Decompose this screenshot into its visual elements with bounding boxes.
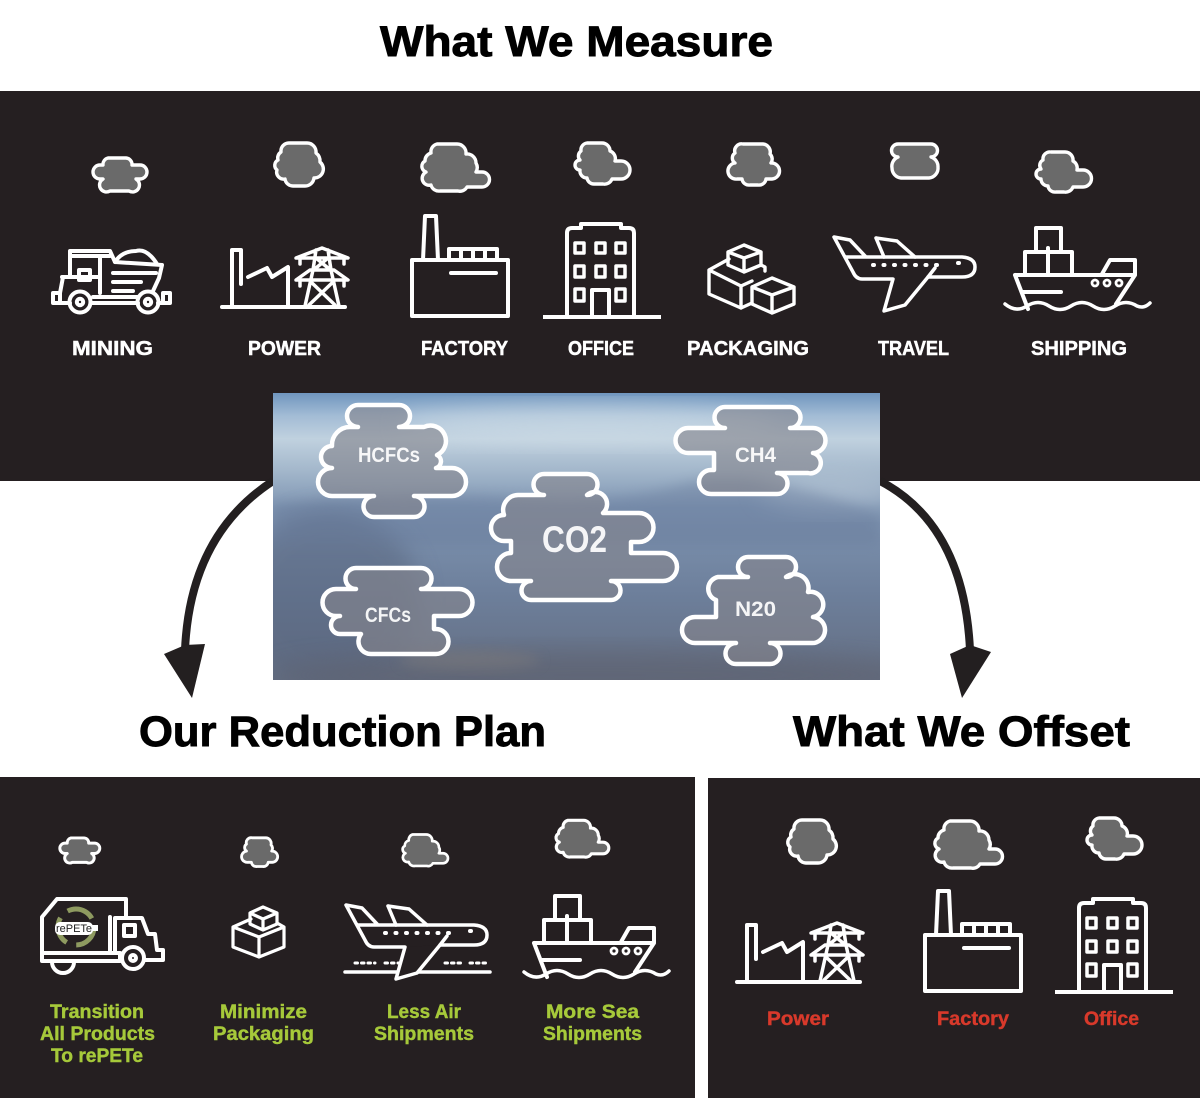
factory cloud [422, 144, 490, 191]
cloud: less air [403, 834, 448, 866]
office cloud [575, 143, 630, 184]
icon: factory [412, 216, 508, 316]
text: transition all products to rePETe: To rePETe [51, 1046, 143, 1067]
text: more sea shipments: Shipments [543, 1024, 642, 1045]
label: office: OFFICE [568, 338, 634, 360]
logo: rePETe label: rePETe [56, 923, 92, 935]
cloud: HCFCs [318, 405, 466, 517]
label: power: POWER [248, 338, 322, 360]
text: transition all products to rePETe [40, 1002, 155, 1067]
panel: our reduction plan [0, 777, 695, 1098]
text: more sea shipments: More Sea [546, 1002, 639, 1023]
panel: what we offset [708, 778, 1200, 1098]
icon: mining truck [53, 251, 170, 312]
heading: Our Reduction Plan: Our Reduction Plan [139, 708, 546, 756]
label: packaging: PACKAGING [687, 338, 809, 360]
heading: What We Offset: What We Offset [793, 708, 1130, 756]
label: factory: FACTORY [421, 338, 509, 360]
cloud: transition [60, 838, 100, 863]
title: What We Measure: What We Measure [380, 18, 773, 66]
arrow: right to offset [880, 481, 991, 698]
text: more sea shipments [543, 1002, 642, 1045]
label: factory: Factory [937, 1009, 1009, 1030]
icon: small package [233, 907, 284, 957]
label: CO2: CO2 [542, 519, 607, 560]
text: transition all products to rePETe: All Products [40, 1024, 155, 1045]
label: N20: N20 [735, 598, 776, 621]
icon: ship [1005, 228, 1150, 310]
icon: power [737, 923, 863, 982]
text: less air shipments: Shipments [374, 1024, 474, 1045]
label: travel: TRAVEL [878, 338, 949, 360]
cloud: office [1087, 818, 1142, 859]
label: power: Power [767, 1009, 830, 1030]
icon: plane [834, 237, 975, 311]
icon: power plant and pylon [222, 248, 348, 307]
cloud: N20 [682, 557, 825, 664]
icon: plane over runway [345, 905, 490, 979]
text: less air shipments [374, 1002, 474, 1045]
text: minimize packaging: Packaging [213, 1024, 314, 1045]
icon: office [1055, 899, 1173, 992]
photo: aerial view with greenhouse gas clouds [273, 393, 880, 680]
cloud: factory [935, 821, 1002, 868]
label: CH4: CH4 [735, 444, 776, 467]
label: CFCs: CFCs [365, 604, 411, 627]
text: minimize packaging: Minimize [220, 1002, 307, 1023]
arrow: left to reduction plan [164, 481, 273, 698]
cloud: more sea [556, 820, 609, 857]
power cloud [275, 143, 323, 186]
label: office: Office [1084, 1009, 1139, 1030]
shipping cloud [1036, 152, 1092, 192]
icon: office [543, 224, 661, 317]
cloud: CH4 [675, 407, 826, 494]
cloud: power [788, 820, 836, 863]
cloud: CO2 [491, 474, 677, 600]
icon: packaging boxes [709, 245, 794, 313]
text: less air shipments: Less Air [387, 1002, 462, 1023]
panel: what we measure [0, 91, 1200, 481]
packaging cloud [728, 144, 780, 185]
mining cloud [93, 158, 147, 192]
cloud: CFCs [322, 568, 472, 654]
icon: factory [925, 891, 1021, 991]
text: transition all products to rePETe: Transition [50, 1002, 144, 1023]
icon: rePETe truck [42, 899, 163, 973]
label: mining: MINING [72, 338, 153, 360]
cloud: minimize [242, 838, 278, 867]
logo: recycling ring [58, 909, 94, 945]
label: shipping: SHIPPING [1031, 338, 1127, 360]
text: minimize packaging [213, 1002, 314, 1045]
travel cloud [892, 144, 938, 178]
icon: sea ship [524, 896, 669, 978]
label: HCFCs: HCFCs [358, 444, 420, 467]
